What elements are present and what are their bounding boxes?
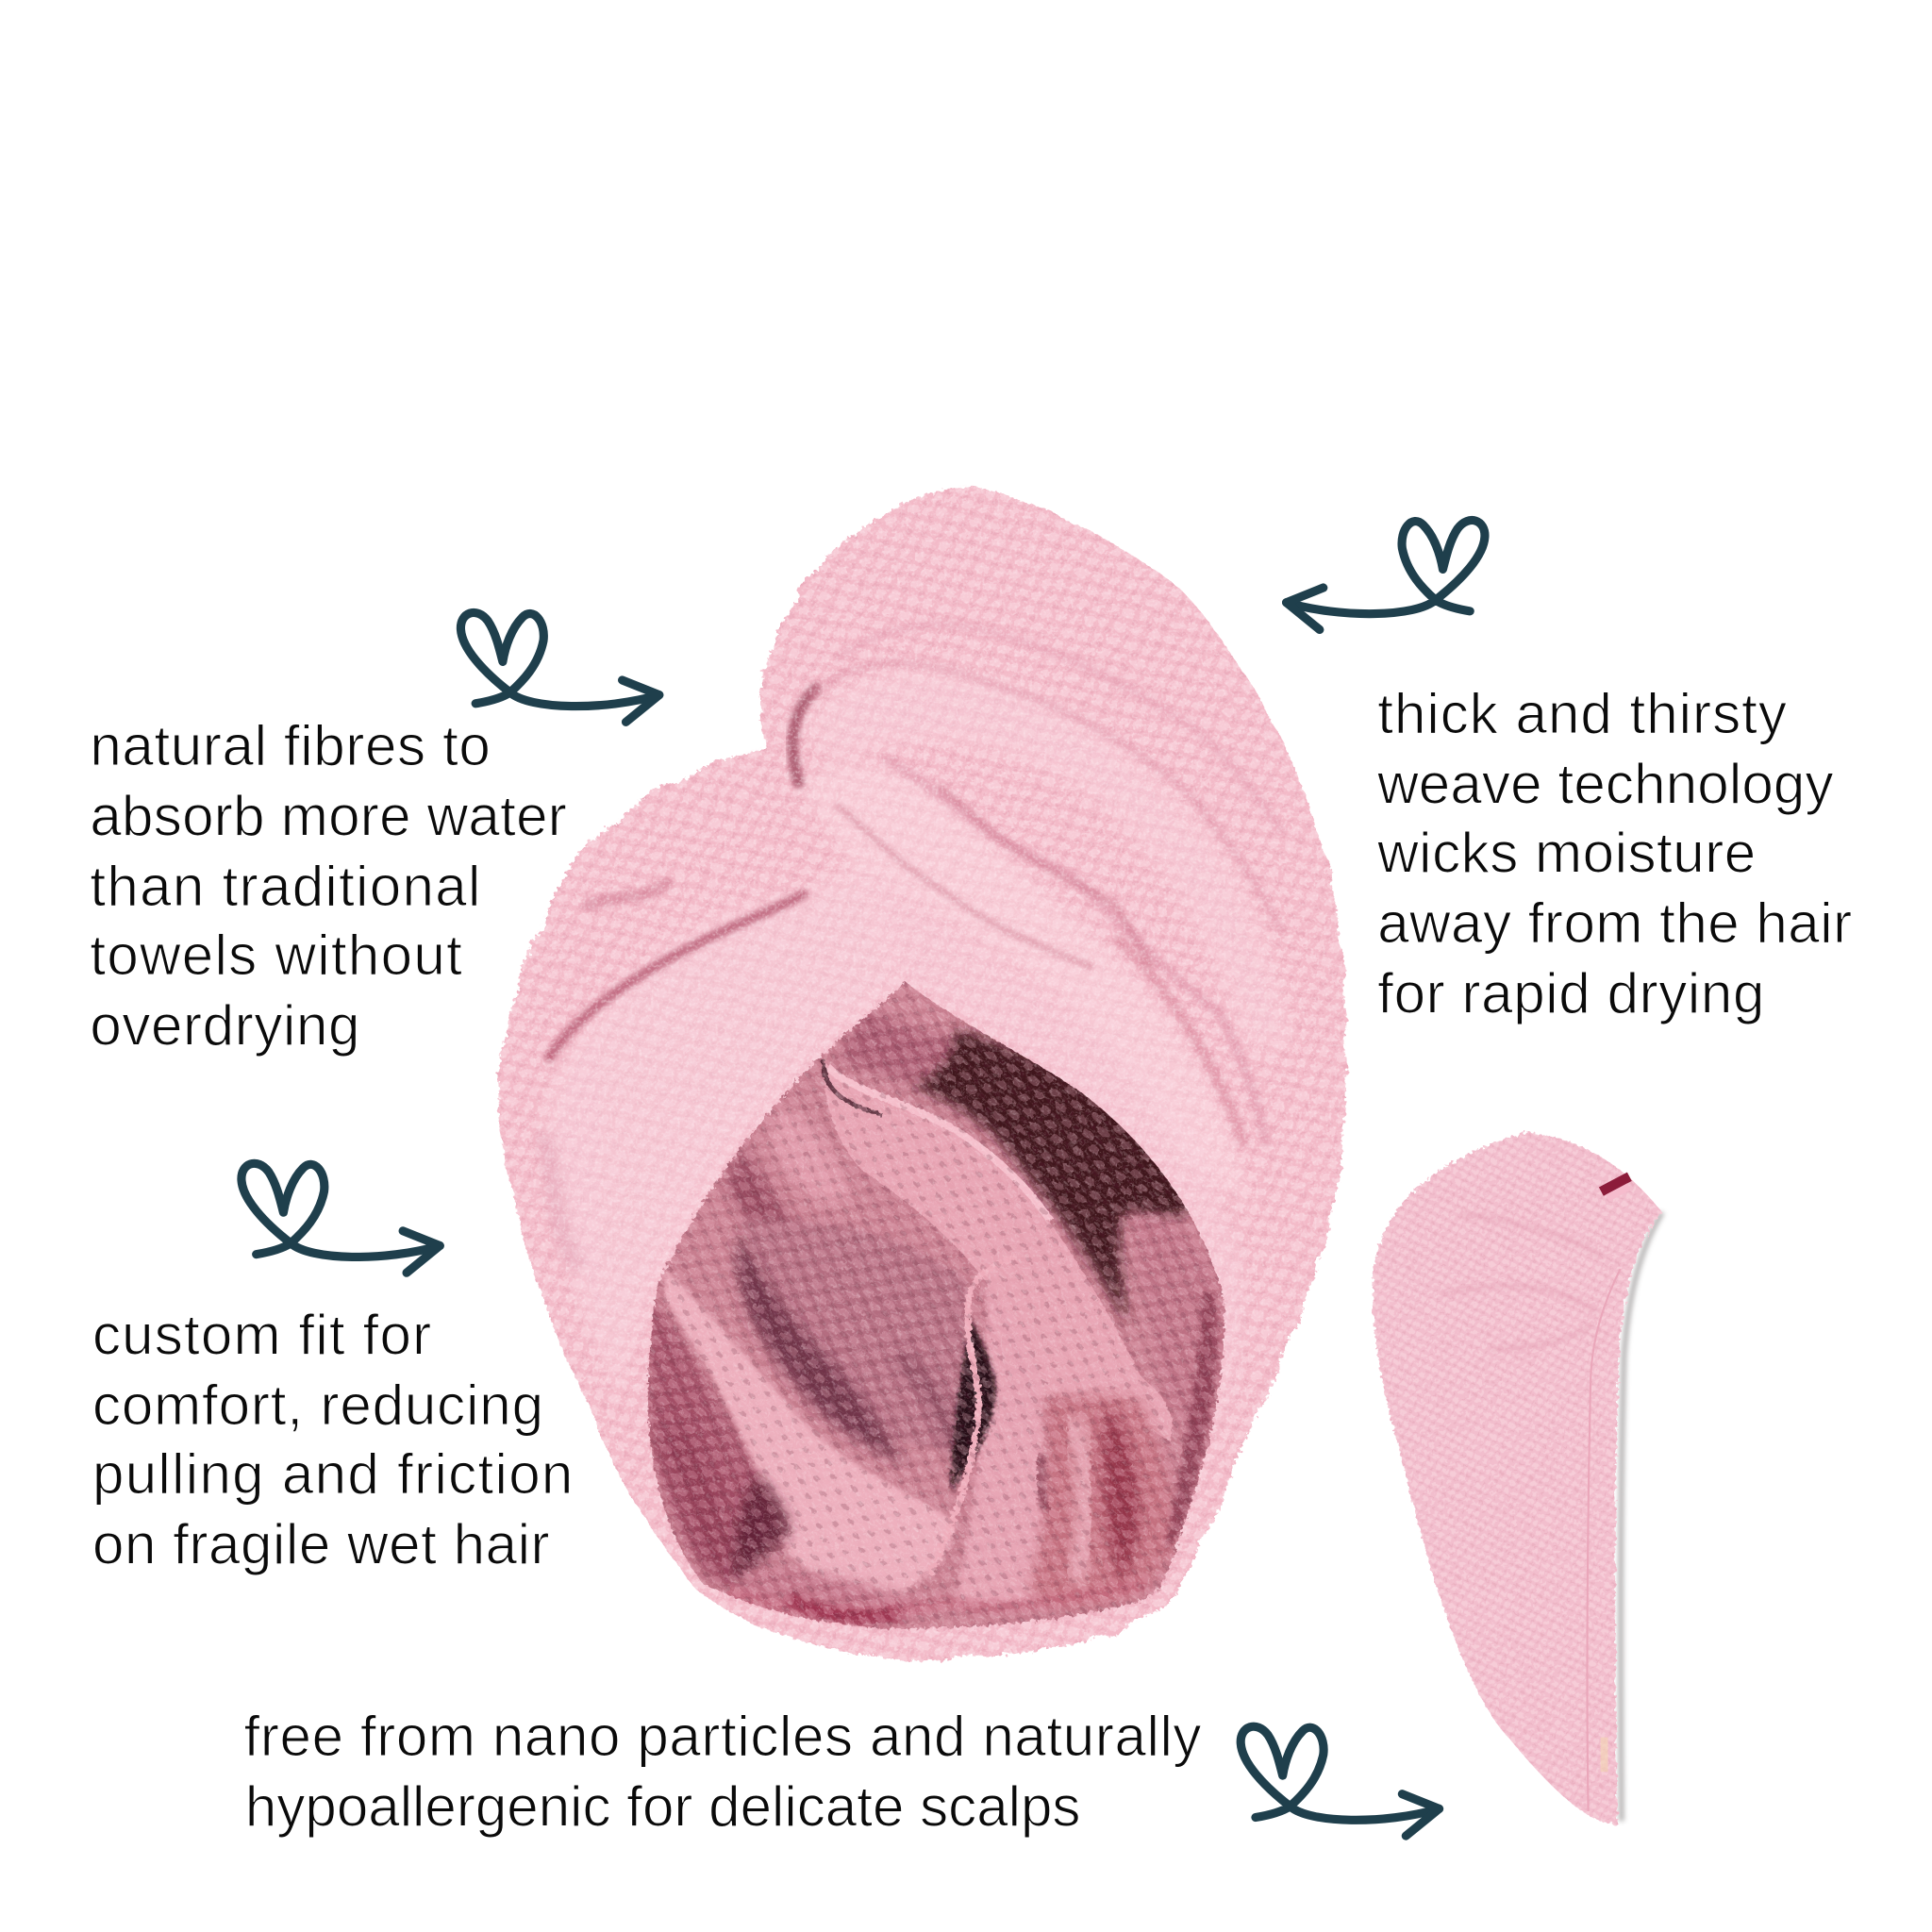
- lower right fold: [1029, 1395, 1176, 1607]
- fold band three highlight: [801, 764, 1251, 1208]
- towel folds and creases: [468, 468, 1368, 1675]
- lower pocket dark: [733, 1473, 790, 1583]
- lower left maroon area: [648, 1293, 759, 1590]
- text: thick and thirsty: weave technology: [1376, 753, 1834, 816]
- text: thick and thirsty: for rapid drying: [1377, 962, 1764, 1025]
- text: custom fit: on fragile wet hair: [92, 1512, 550, 1575]
- bottom red shadow: [727, 1583, 1146, 1612]
- fold band two highlight: [801, 665, 1293, 1047]
- text: natural fibres: towels without: [90, 924, 462, 987]
- large turban towel product: [468, 468, 1368, 1675]
- right edge shade: [1164, 1293, 1217, 1553]
- right weave panel: [1130, 1214, 1224, 1454]
- top inner fold edge: [828, 1067, 1050, 1220]
- mid-left dark band: [737, 1232, 906, 1466]
- crease: knot pocket: [792, 689, 816, 782]
- text: natural fibres: than traditional: [90, 855, 480, 918]
- text: thick and thirsty: away from the hair: [1377, 891, 1852, 955]
- seam: [930, 1257, 1017, 1574]
- crease: left fold lines: [550, 894, 804, 1058]
- dark crescent: [912, 1029, 1191, 1324]
- left pale diagonal fold: [665, 1269, 955, 1602]
- icon: heart arrow pointing to flat towel: [1241, 1726, 1440, 1836]
- text: free from nano particles: hypoallergenic for delicate scalps: [245, 1775, 1080, 1839]
- left mid body: [740, 1220, 967, 1448]
- bottom fold: [732, 1566, 908, 1630]
- icon: heart arrow pointing to towel, upper left: [460, 612, 659, 722]
- front left panel highlight: [542, 862, 906, 1392]
- small flat towel product: [1373, 1132, 1662, 1824]
- icon: heart arrow pointing to towel, upper right: [1287, 521, 1485, 629]
- text: free from nano particles: free from nano particles and naturally: [244, 1705, 1201, 1768]
- flat towel body: [1373, 1132, 1662, 1824]
- text: natural fibres: overdrying: [90, 994, 359, 1058]
- text: natural fibres: natural fibres to: [90, 714, 491, 777]
- flat towel seam and gathers: [1441, 1214, 1621, 1811]
- flat towel label loop: [1599, 1173, 1635, 1203]
- upper left mid shade: [720, 1145, 796, 1224]
- text: custom fit: custom fit for: [92, 1303, 431, 1366]
- flat towel gold tag: [1601, 1738, 1607, 1772]
- text: thick and thirsty: wicks moisture: [1376, 822, 1756, 885]
- text: thick and thirsty: thick and thirsty: [1377, 682, 1787, 745]
- text: custom fit: pulling and friction: [92, 1442, 573, 1506]
- flat towel drop shadow: [1621, 1212, 1662, 1821]
- towel outer body: [499, 484, 1346, 1659]
- crease: upper fold edges: [837, 625, 1283, 833]
- text: natural fibres: absorb more water: [90, 785, 567, 848]
- icon: heart arrow, middle left: [242, 1163, 440, 1273]
- text: custom fit: comfort, reducing: [92, 1374, 543, 1437]
- central vertical dark crease: [951, 1319, 995, 1491]
- central pale fold: [824, 1063, 1172, 1441]
- towel inner opening: [646, 981, 1226, 1631]
- right center pale fold: [955, 1281, 1046, 1602]
- front right panel highlight: [872, 891, 1241, 1396]
- weave overlay: [616, 961, 1257, 1651]
- pale panel behind dark crescent: [838, 1010, 974, 1084]
